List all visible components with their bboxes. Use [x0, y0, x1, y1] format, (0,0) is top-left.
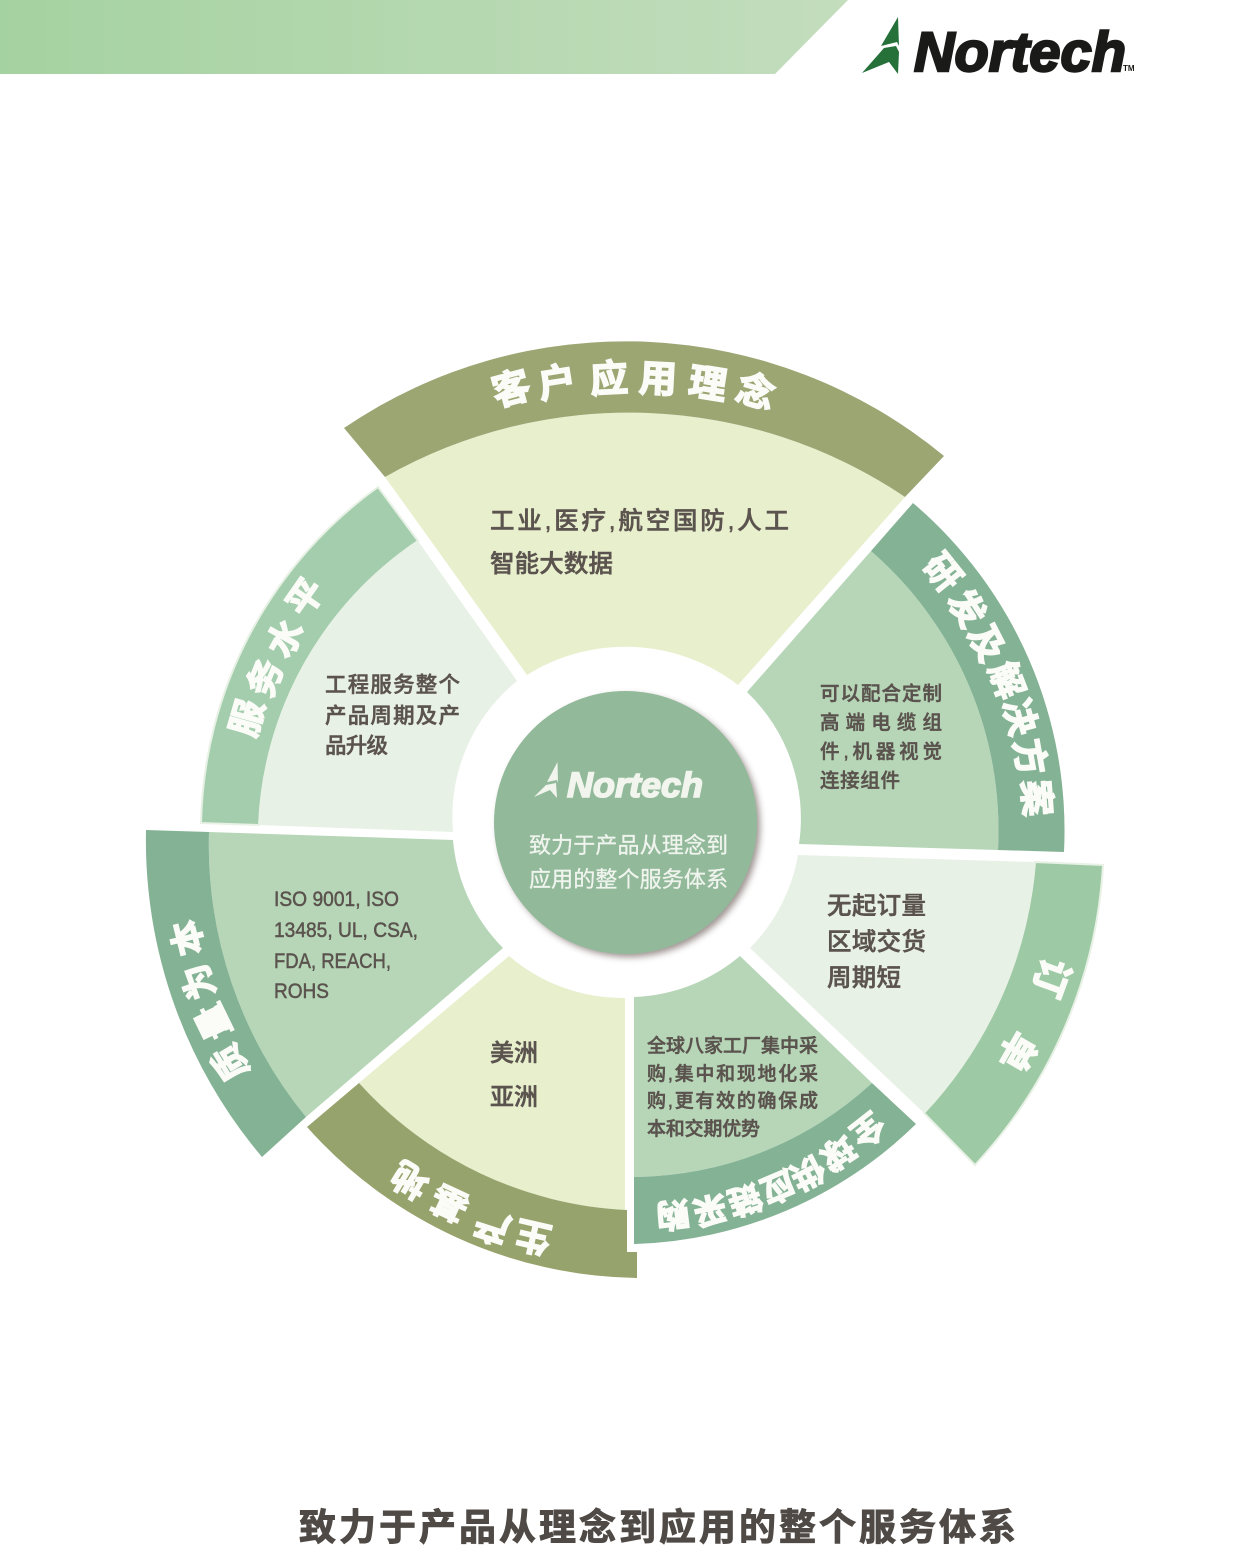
text: order terms: [827, 892, 926, 992]
text: order terms: 区域交货: [827, 928, 926, 956]
text: regions: 美洲: [490, 1040, 538, 1067]
circle shadow: [498, 695, 760, 957]
panel: quality first (left): [146, 830, 503, 1157]
text: order terms: 无起订量: [827, 892, 926, 920]
heading: 客户应用理念: 客: [488, 365, 535, 415]
text: engineering services: [325, 673, 460, 758]
heading: 客户应用理念: 用: [638, 358, 678, 402]
band: upper left segment: [201, 487, 418, 825]
band: top segment: [344, 341, 944, 497]
central caption: 致力于产品从理念到: [529, 833, 728, 858]
heading: 生产基地: 生: [511, 1212, 555, 1261]
heading: 服务水平: [223, 571, 333, 741]
text: industries: 智能大数据: [490, 550, 613, 578]
panel: orders (lower right): [750, 855, 1103, 1165]
heading: 研发及解决方案: [915, 545, 1058, 817]
text: regions: [490, 1040, 538, 1111]
text: engineering services: 品升级: [325, 734, 388, 758]
band: bottom right segment: [634, 1083, 916, 1244]
heading: 全球供应链采购: 链: [724, 1177, 766, 1222]
text: certifications: ISO 9001, ISO: [274, 888, 399, 911]
body: bottom left segment: [359, 956, 625, 1210]
body: top segment: [385, 413, 905, 685]
band: bottom left segment: [307, 1083, 637, 1278]
heading: 全球供应链采购: 全: [843, 1105, 892, 1154]
heading: 服务水平: 水: [259, 613, 312, 664]
heading: 客户应用理念: 户: [535, 360, 579, 408]
text: certifications: 13485, UL, CSA,: [274, 919, 418, 942]
trademark mark: TM: [1123, 64, 1135, 73]
heading: 全球供应链采购: 供: [785, 1149, 831, 1197]
text: certifications: FDA, REACH,: [274, 950, 391, 973]
text: custom cable components: 连接组件: [820, 770, 900, 792]
heading: 订单: [989, 952, 1076, 1078]
text: purchasing description: 全球八家工厂集中采: [647, 1035, 818, 1057]
text: custom cable components: 高端电缆组: [820, 712, 942, 734]
icon: white logo arrow: [534, 762, 558, 798]
heading: 研发及解决方案: 研: [915, 545, 970, 599]
heading: 生产基地: 产: [469, 1201, 516, 1252]
text: regions: 亚洲: [490, 1084, 538, 1111]
text: purchasing description: [647, 1035, 818, 1140]
panel: customer application concept (top): [344, 341, 944, 685]
header banner: [0, 0, 848, 74]
text: order terms: 周期短: [827, 964, 901, 992]
body: upper left segment: [259, 541, 517, 832]
heading: 研发及解决方案: 发: [940, 582, 994, 635]
heading: 订单: 单: [989, 1024, 1044, 1078]
icon: logo arrow: [862, 17, 899, 74]
body: upper right segment: [747, 551, 999, 850]
panel: service level (upper left): [201, 487, 517, 832]
text: engineering services: 工程服务整个: [325, 673, 460, 697]
panel: production bases (bottom left): [307, 956, 637, 1278]
heading: 服务水平: 服: [223, 695, 272, 741]
heading: 客户应用理念: 理: [686, 361, 730, 409]
heading: 订单: 订: [1024, 952, 1076, 1002]
heading: 质量为本: [165, 916, 257, 1087]
heading: 研发及解决方案: 及: [960, 618, 1013, 669]
logo wordmark: Nortech: [914, 20, 1126, 83]
text: engineering services: 产品周期及产: [325, 704, 460, 728]
logo wordmark: white: Nortech: [567, 766, 703, 805]
heading: 研发及解决方案: 案: [1015, 779, 1058, 817]
heading: 质量为本: 量: [189, 997, 240, 1046]
panel: central circle: [494, 691, 760, 957]
heading: 质量为本: 为: [175, 958, 224, 1005]
text: purchasing description: 购,更有效的确保成: [647, 1090, 818, 1112]
title: 致力于产品从理念到应用的整个服务体系: [299, 1507, 1016, 1548]
text: custom cable components: 可以配合定制: [820, 683, 942, 705]
band: lower right segment: [924, 862, 1103, 1165]
text: certifications: ROHS: [274, 980, 329, 1003]
heading: 服务水平: 务: [240, 654, 291, 703]
panel: R&D and solutions (upper right): [747, 503, 1065, 852]
heading: 客户应用理念: 念: [731, 367, 780, 418]
heading: 客户应用理念: 应: [589, 358, 629, 402]
heading: 研发及解决方案: 解: [981, 656, 1032, 704]
text: certifications: [274, 888, 418, 1003]
body: bottom right segment: [634, 956, 872, 1177]
text: purchasing description: 购,集中和现地化采: [647, 1063, 818, 1085]
text: custom cable components: [820, 683, 942, 792]
text: custom cable components: 件,机器视觉: [820, 741, 942, 763]
text: purchasing description: 本和交期优势: [647, 1118, 760, 1140]
heading: 研发及解决方案: 方: [1006, 736, 1053, 778]
heading: 客户应用理念: [488, 358, 780, 418]
band: upper right segment: [871, 503, 1065, 852]
heading: 生产基地: [384, 1153, 555, 1261]
text: industries: [490, 507, 789, 578]
heading: 研发及解决方案: 决: [995, 694, 1044, 740]
heading: 质量为本: 本: [165, 916, 212, 959]
central caption: [529, 833, 728, 892]
text: industries: 工业,医疗,航空国防,人工: [490, 507, 789, 535]
heading: 生产基地: 基: [425, 1176, 475, 1229]
heading: 质量为本: 质: [206, 1037, 257, 1087]
heading: 全球供应链采购: 购: [654, 1194, 692, 1235]
panel: global supply chain purchasing (bottom right): [634, 956, 916, 1244]
central caption: 应用的整个服务体系: [529, 867, 728, 892]
heading: 全球供应链采购: 采: [690, 1188, 730, 1231]
band: left segment: [146, 830, 306, 1157]
heading: 全球供应链采购: 应: [755, 1163, 800, 1210]
heading: 全球供应链采购: [654, 1105, 892, 1235]
body: lower right segment: [750, 855, 1035, 1113]
logo: Nortech top right: [862, 17, 1135, 83]
body: left segment: [209, 832, 503, 1117]
heading: 服务水平: 平: [278, 571, 333, 624]
central disc: [494, 691, 757, 954]
heading: 全球供应链采购: 球: [814, 1128, 862, 1177]
heading: 生产基地: 地: [384, 1153, 436, 1206]
